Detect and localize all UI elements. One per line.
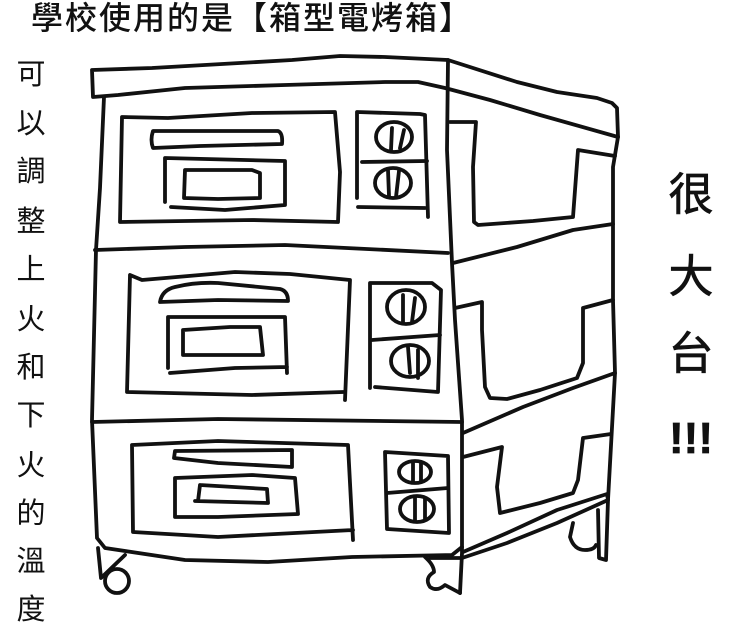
middle tier door [127, 272, 350, 400]
left vertical caption: 溫 [16, 545, 46, 578]
left vertical caption: 以 [16, 108, 46, 140]
left vertical caption: 整 [16, 205, 46, 238]
top tier knobs [357, 112, 428, 217]
side panel recesses [450, 122, 615, 513]
left vertical caption: 火 [16, 304, 46, 336]
left vertical caption: 上 [16, 254, 46, 286]
left vertical caption [16, 59, 46, 626]
top tier door [120, 112, 340, 222]
right vertical caption [668, 169, 714, 463]
left vertical caption: 度 [16, 593, 46, 626]
bottom tier door [132, 441, 353, 540]
right vertical caption: 大 [668, 251, 714, 302]
illustration: three-tier deck oven [92, 56, 618, 593]
left vertical caption: 和 [16, 352, 46, 384]
left vertical caption: 下 [16, 400, 46, 432]
right vertical caption: !!! [669, 414, 713, 463]
right vertical caption: 很 [668, 169, 714, 220]
title: 學校使用的是【箱型電烤箱】 [31, 0, 471, 36]
left vertical caption: 火 [16, 450, 46, 482]
oven body outline [92, 60, 618, 593]
bottom tier knobs [385, 452, 449, 533]
left vertical caption: 可 [16, 59, 46, 91]
right vertical caption: 台 [668, 328, 714, 379]
left vertical caption: 的 [16, 497, 46, 530]
casters [98, 523, 596, 593]
oven top lid [92, 56, 618, 137]
middle tier knobs [370, 283, 441, 392]
left vertical caption: 調 [16, 155, 46, 188]
